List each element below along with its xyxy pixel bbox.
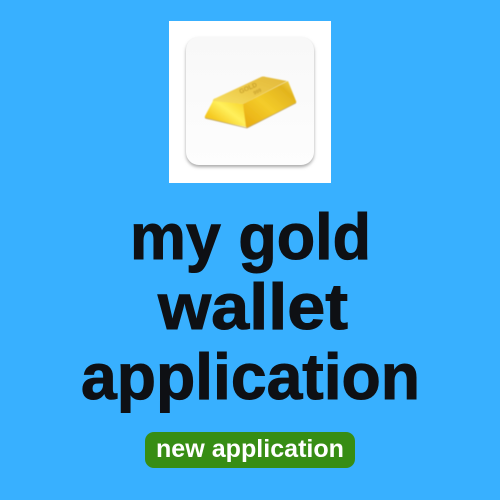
icon: gold bar: [205, 76, 296, 128]
badge label: new application: [156, 435, 344, 463]
app icon: [169, 21, 331, 183]
icon: gold bar: 999: [253, 88, 263, 97]
icon: gold bar: GOLD: [238, 81, 259, 96]
badge: new application: [145, 432, 355, 468]
title line 1: my gold: [130, 200, 371, 273]
badge pill: [145, 432, 355, 468]
title line 3: application: [81, 340, 420, 413]
title line 2: wallet: [157, 270, 348, 343]
title: [81, 200, 420, 413]
icon background: white square: [169, 21, 331, 183]
icon card shadow: [186, 39, 314, 167]
icon card: [186, 37, 314, 165]
